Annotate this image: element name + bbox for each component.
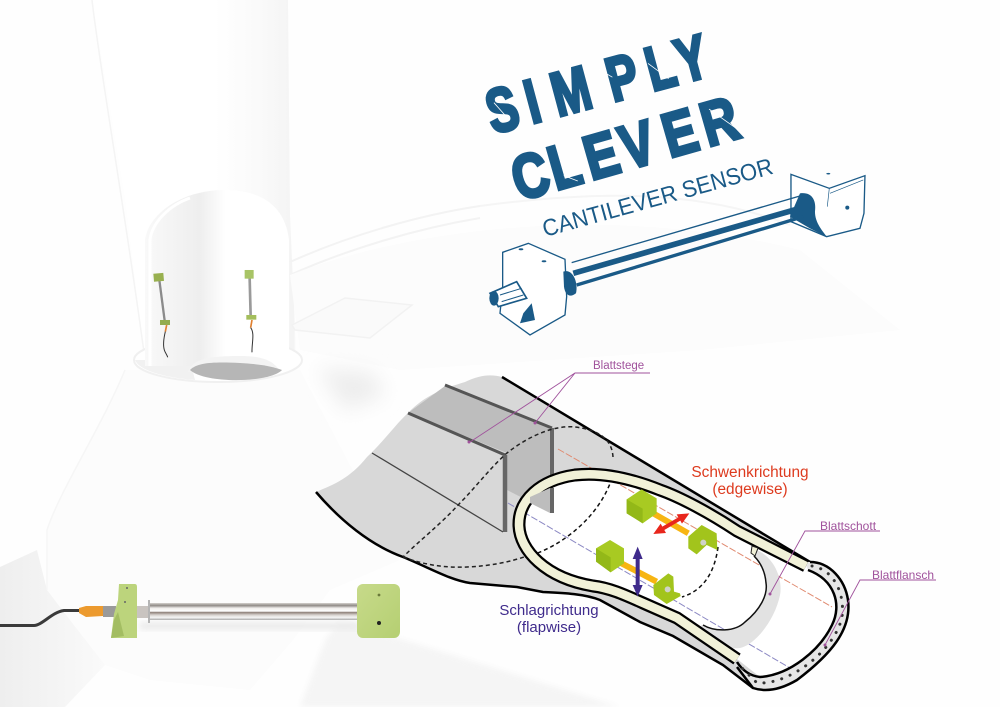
callout: Blattflansch	[824, 568, 936, 646]
rod assembly	[134, 606, 148, 618]
rear mount	[111, 584, 137, 638]
centre lines	[558, 449, 832, 607]
subtitle: CANTILEVER SENSOR	[539, 153, 776, 242]
label: flapwise: (flapwise)	[517, 619, 581, 636]
left bracket	[500, 243, 567, 335]
title: simply clever	[479, 22, 776, 242]
interior dashed arcs	[527, 478, 718, 597]
red arrow	[653, 513, 689, 534]
lower sensor	[596, 540, 681, 604]
cantilever sensor photo (foreground)	[0, 584, 400, 638]
blade root opening with dome	[134, 190, 302, 382]
callout: Blattschott	[768, 519, 880, 596]
shadow	[140, 622, 360, 630]
callout: Blattschott: Blattschott	[820, 519, 877, 533]
label: edgewise: (edgewise)	[712, 481, 788, 498]
flange	[735, 562, 848, 690]
title line 1: SIMPLY	[479, 22, 716, 147]
rotor blade cross-section diagram	[316, 375, 848, 690]
illustration: blue line-art sensor	[489, 173, 865, 335]
cross-section interior	[519, 474, 838, 677]
front mount	[357, 584, 400, 638]
cable	[0, 610, 80, 626]
callout: Blattflansch: Blattflansch	[872, 568, 934, 582]
purple arrow	[633, 547, 643, 597]
blade skin	[316, 375, 848, 690]
label: Schwenkrichtung: Schwenkrichtung	[691, 464, 809, 481]
label: Schlagrichtung: Schlagrichtung	[499, 602, 599, 619]
connector	[79, 606, 103, 617]
upper sensor	[627, 489, 717, 554]
callout: Blattstege: Blattstege	[593, 360, 644, 372]
dashed section outline	[403, 427, 613, 567]
front web	[408, 413, 505, 455]
rear web	[408, 386, 552, 513]
sensor in blade root: right	[245, 270, 256, 352]
bulkhead tab	[751, 546, 758, 556]
sensor in blade root: left	[153, 273, 170, 357]
blade outer outline	[502, 377, 810, 562]
rod	[572, 195, 803, 263]
bulkhead	[698, 550, 781, 648]
title line 2: CLEVER	[503, 83, 746, 214]
right bracket	[791, 174, 865, 237]
rear web tip	[530, 488, 554, 513]
callout: Blattstege	[468, 360, 650, 444]
cream shell ring	[519, 474, 806, 659]
